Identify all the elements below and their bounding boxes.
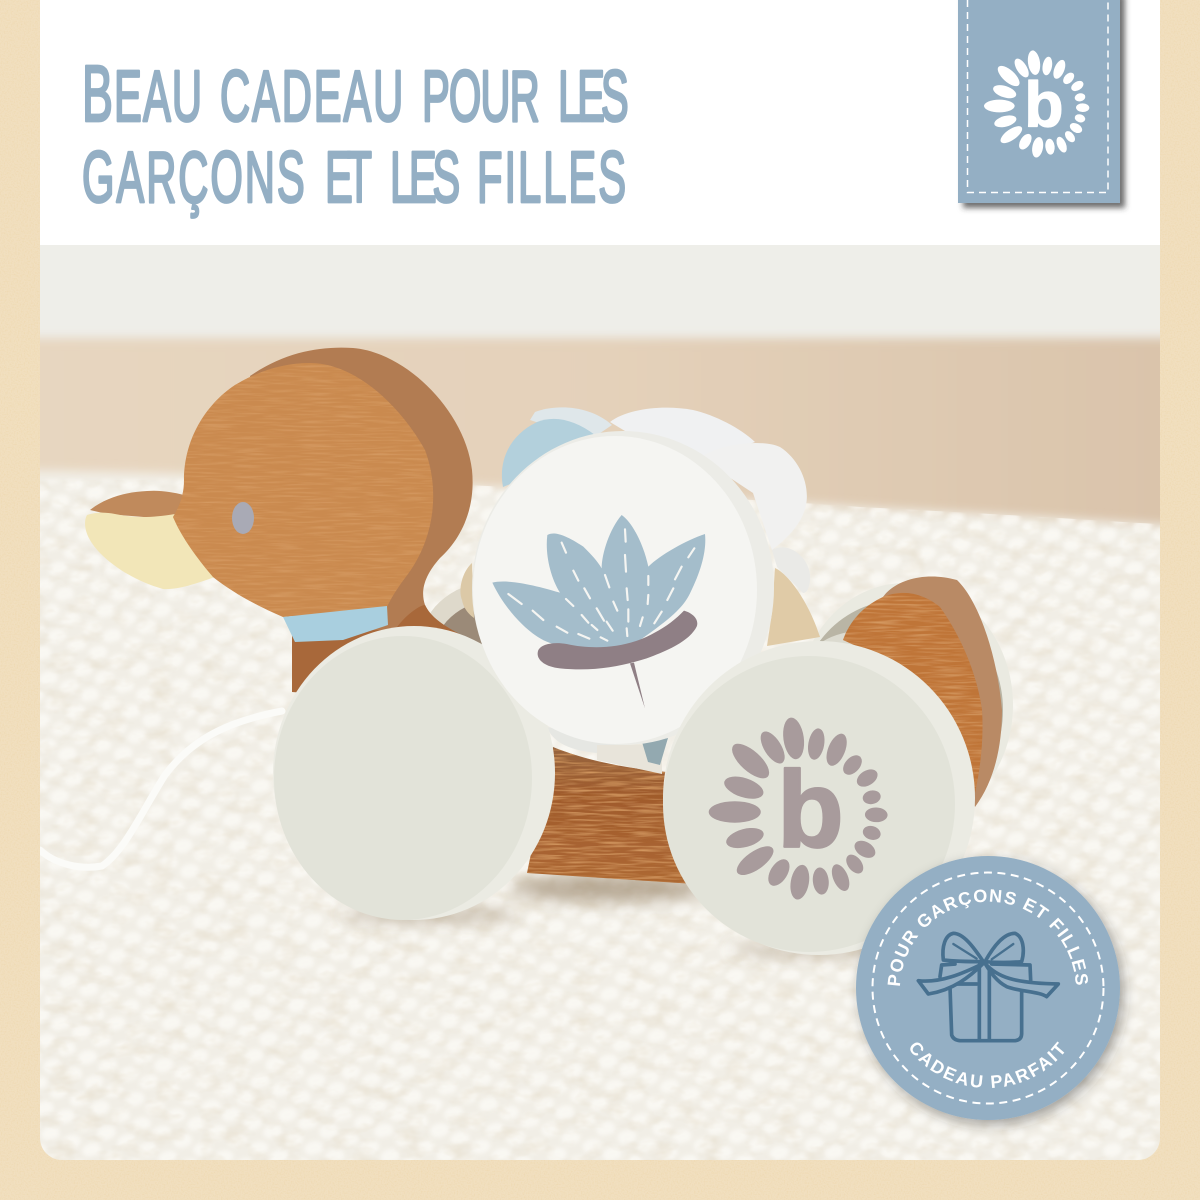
flower illustration [492,515,705,708]
duck neck [292,605,460,692]
toy shadows on the rug [340,874,910,955]
photo background: wall [40,245,1160,343]
toy: duck head and neck [85,348,482,700]
icon: white flower logo [984,50,1089,158]
toy: back wheel behind tail [814,584,1013,779]
duck eye [232,502,254,534]
title: POUR [422,57,540,137]
duck head face [173,363,433,617]
product photo [40,245,1160,1160]
duck collar [283,606,388,642]
toy: pull string [40,711,282,867]
title: FILLES [477,138,626,218]
toy: left wheel [273,626,555,920]
icon: mauve flower logo: b [777,750,844,871]
brand tag with logo [958,0,1120,203]
title: CADEAU [220,57,403,137]
title: GARÇONS [82,138,305,218]
duck beak [85,491,215,589]
title: LES [390,138,460,218]
duck head side [250,348,482,700]
icon: mauve flower logo [709,716,888,901]
toy: white disc with flower [472,431,774,745]
toy: right wheel with logo [663,641,975,955]
title: ET [325,138,372,218]
toy: white and blue petals behind [460,407,820,774]
header panel [40,0,1160,245]
badge text: top: POUR GARÇONS ET FILLES [888,889,1088,986]
title: LES [558,57,629,137]
toy: wooden tail [843,576,1002,807]
toy: back wheel behind neck [430,588,482,644]
photo background: knitted rug [40,466,1160,1160]
icon: white flower logo: b [1024,69,1063,141]
gift badge [852,853,1132,1133]
title [82,49,629,218]
photo background: wooden floor [40,332,1160,526]
toy: lower wooden body [527,747,700,884]
title: BEAU [82,49,202,138]
icon: gift box [918,933,1058,1041]
badge text: bottom: CADEAU PARFAIT [910,1042,1064,1088]
